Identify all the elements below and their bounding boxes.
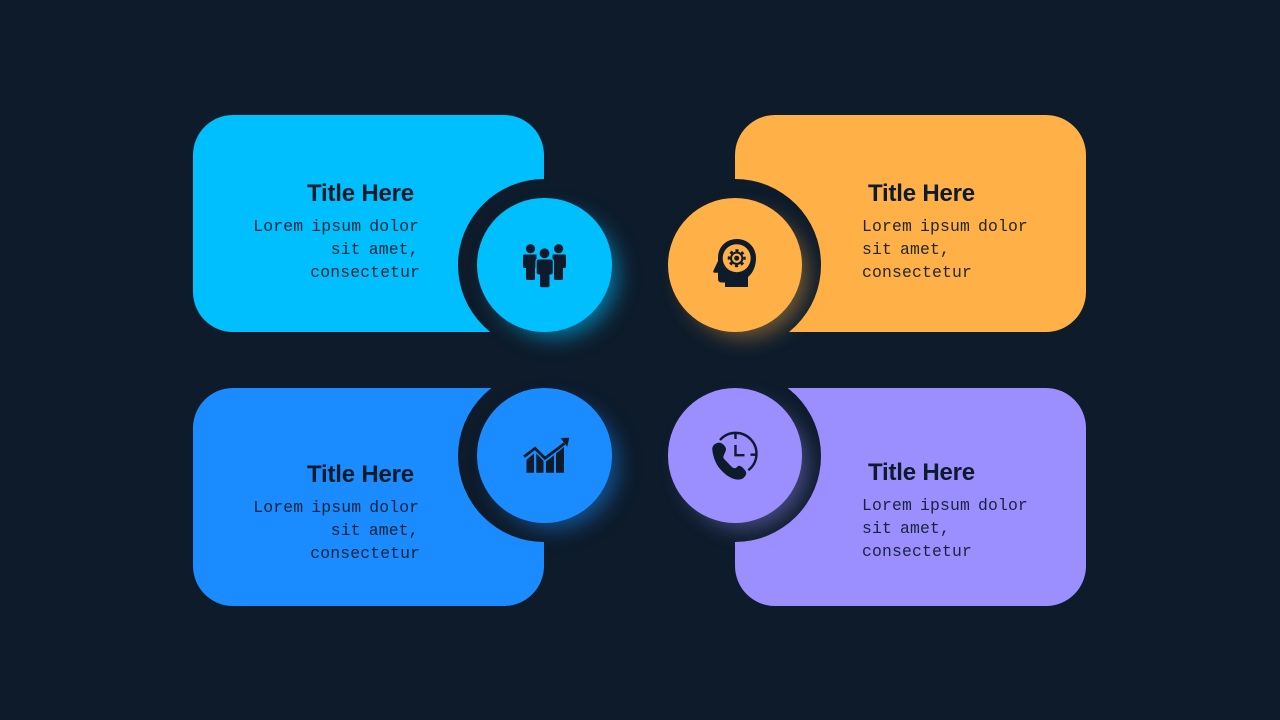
circle: top left: [477, 198, 612, 332]
panel: top right (orange): [735, 115, 1086, 332]
circle: top right: [668, 198, 802, 332]
text block: bottom right: consectetur: [862, 542, 972, 561]
text block: top left: consectetur: [310, 263, 420, 282]
panel: bottom left (blue): [193, 388, 544, 606]
icon: head with gear: [713, 239, 756, 287]
ring cut-out: top right: [648, 179, 821, 351]
text block: top right: sit amet,: [862, 240, 950, 259]
heading: top right: Title Here: [868, 180, 975, 207]
heading: bottom right: Title Here: [868, 459, 975, 486]
text block: top right: Lorem ipsum dolor: [862, 217, 1028, 236]
text block: top right: consectetur: [862, 263, 972, 282]
panel: top left (cyan): [193, 115, 544, 332]
icon: team of people: [523, 244, 566, 288]
heading: top left: Title Here: [307, 180, 414, 207]
text block: bottom right: sit amet,: [862, 519, 950, 538]
circle: bottom left: [477, 388, 612, 522]
ring cut-out: bottom right: [648, 370, 821, 542]
text block: bottom left: [253, 498, 420, 563]
text block: top right: [862, 217, 1028, 282]
text block: top left: Lorem ipsum dolor: [253, 217, 419, 236]
heading: bottom left: Title Here: [307, 461, 414, 488]
panel: bottom right (purple): [735, 388, 1086, 606]
text block: bottom right: [862, 496, 1028, 561]
ring cut-out: bottom left: [458, 370, 630, 542]
icon: phone and clock: [712, 432, 758, 480]
text block: bottom left: consectetur: [310, 544, 420, 563]
text block: bottom left: Lorem ipsum dolor: [253, 498, 419, 517]
circle: bottom right: [668, 388, 802, 522]
ring cut-out: top left: [458, 179, 630, 351]
text block: bottom right: Lorem ipsum dolor: [862, 496, 1028, 515]
icon: rising chart: [523, 438, 570, 473]
text block: top left: sit amet,: [331, 240, 419, 259]
text block: top left: [253, 217, 420, 282]
text block: bottom left: sit amet,: [331, 521, 419, 540]
